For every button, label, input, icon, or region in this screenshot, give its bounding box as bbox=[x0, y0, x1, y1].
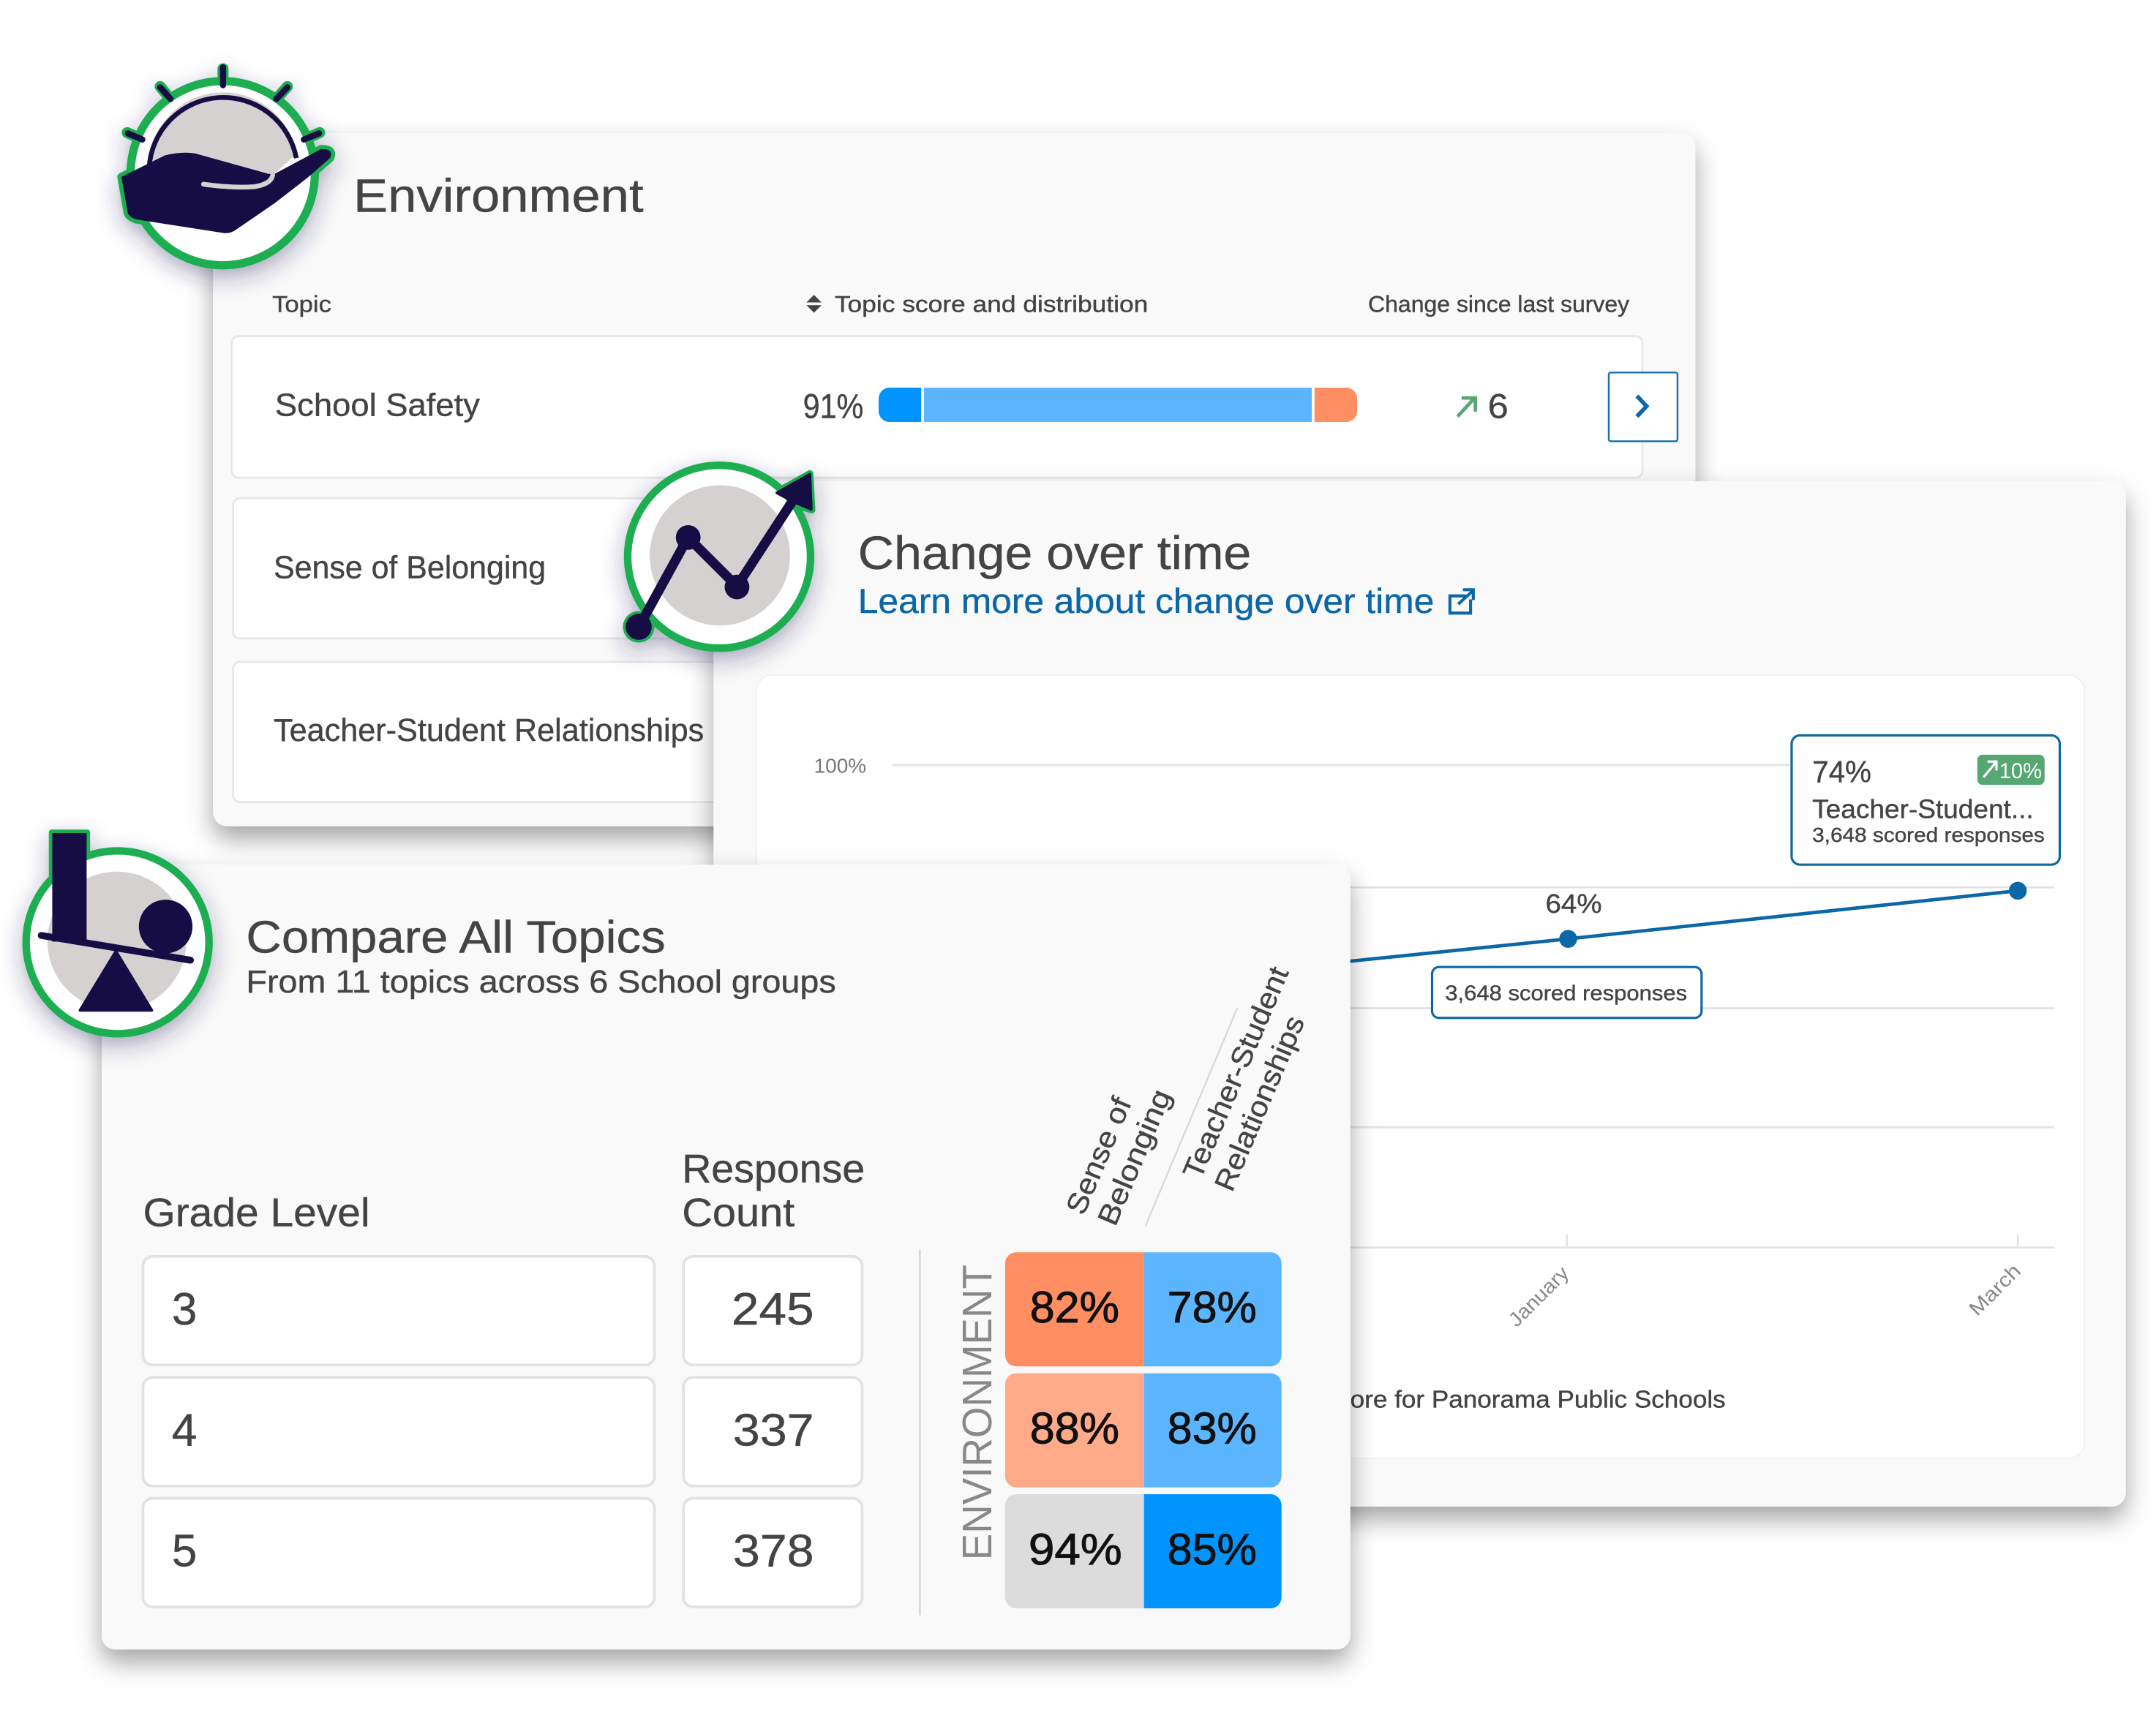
response count cells bbox=[683, 1257, 862, 1607]
tooltip: 3,648 scored responses bbox=[1432, 967, 1702, 1018]
column header: Topic: Topic bbox=[272, 292, 331, 317]
row: School Safety bbox=[232, 336, 1678, 478]
grade level cells: 3 bbox=[172, 1284, 197, 1335]
column header: Change since last survey: Change since last survey bbox=[1368, 292, 1630, 317]
column header: Response Count: Response bbox=[682, 1146, 865, 1191]
tooltip responses: 3,648 scored responses bbox=[1812, 823, 2045, 846]
heatmap bbox=[1005, 1252, 1282, 1608]
tooltip value: 74%: 74% bbox=[1812, 755, 1871, 788]
grade level cells bbox=[143, 1257, 655, 1607]
heading: Change over time: Change over time bbox=[858, 527, 1251, 579]
rotated label: Sense of Belonging bbox=[1060, 1085, 1178, 1230]
badge: up 10%: 10% bbox=[1999, 759, 2042, 783]
score: 91%: 91% bbox=[803, 386, 863, 425]
subheading: From 11 topics across 6 School groups bbox=[246, 965, 836, 1000]
stacked distribution bar bbox=[879, 388, 1357, 422]
icon: balance scale bbox=[26, 829, 209, 1033]
tooltip: Teacher-Student 74% bbox=[1792, 736, 2059, 864]
column header: Response Count bbox=[682, 1146, 865, 1235]
column header: Topic score and distribution: Topic score and distribution bbox=[835, 292, 1148, 317]
category label: ENVIRONMENT: ENVIRONMENT bbox=[954, 1265, 1000, 1560]
icon: hand holding circle bbox=[121, 67, 331, 265]
topic name: Teacher-Student Relationships: Teacher-Student Relationships bbox=[274, 713, 704, 748]
tooltip topic: Teacher-Student... bbox=[1812, 794, 2034, 824]
button: chevron bbox=[1609, 372, 1678, 441]
heatmap: 78% bbox=[1168, 1283, 1257, 1332]
grade level cells: 4 bbox=[172, 1405, 197, 1455]
heading: Environment: Environment bbox=[353, 169, 644, 222]
topic name: Sense of Belonging: Sense of Belonging bbox=[274, 550, 546, 585]
heading: Compare All Topics: Compare All Topics bbox=[246, 912, 666, 963]
line chart card bbox=[756, 675, 2084, 1458]
chart caption: ore for Panorama Public Schools bbox=[1351, 1386, 1726, 1413]
response count cells: 378 bbox=[733, 1526, 814, 1577]
rotated label: Sense of Belonging: Sense of bbox=[1060, 1092, 1138, 1219]
heatmap: 83% bbox=[1168, 1404, 1257, 1453]
y axis label: 100%: 100% bbox=[814, 753, 866, 777]
data line with points bbox=[1320, 882, 2027, 964]
heatmap: 82% bbox=[1030, 1283, 1119, 1332]
data label: 64%: 64% bbox=[1546, 889, 1602, 919]
topic name: School Safety: School Safety bbox=[275, 388, 480, 423]
grade level cells: 5 bbox=[172, 1526, 197, 1577]
heatmap: 88% bbox=[1030, 1404, 1119, 1453]
column header: Grade Level: Grade Level bbox=[143, 1190, 370, 1235]
badge: up 10% bbox=[1977, 755, 2045, 785]
row: Sense of Belonging bbox=[233, 498, 1642, 639]
panel: Change over time bbox=[713, 481, 2126, 1507]
x axis label: January: January bbox=[1503, 1262, 1574, 1331]
heatmap: 94% bbox=[1029, 1525, 1122, 1574]
x axis label: March: March bbox=[1964, 1259, 2025, 1320]
change value: 6: 6 bbox=[1488, 386, 1509, 425]
column header: Response Count: Count bbox=[682, 1190, 795, 1235]
response count cells: 337 bbox=[733, 1405, 814, 1455]
icon: external link bbox=[1450, 589, 1473, 613]
rotated label: Teacher-Student Relationships: Teacher-Student bbox=[1177, 962, 1295, 1183]
icon: up arrow bbox=[1457, 398, 1476, 416]
icon: sort bbox=[806, 295, 822, 313]
panel: Compare All Topics bbox=[102, 864, 1351, 1649]
rotated label: Sense of Belonging: Belonging bbox=[1092, 1085, 1178, 1230]
row: Teacher-Student Relationships bbox=[233, 662, 1642, 802]
rotated label: Teacher-Student Relationships: Relationships bbox=[1209, 1011, 1311, 1196]
link: Learn more about change over time: Learn more about change over time bbox=[858, 581, 1434, 620]
tooltip: 3,648 scored responses: 3,648 scored responses bbox=[1445, 982, 1687, 1005]
response count cells: 245 bbox=[732, 1284, 814, 1335]
icon: rising line chart bbox=[623, 465, 812, 648]
heatmap: 85% bbox=[1168, 1525, 1257, 1574]
